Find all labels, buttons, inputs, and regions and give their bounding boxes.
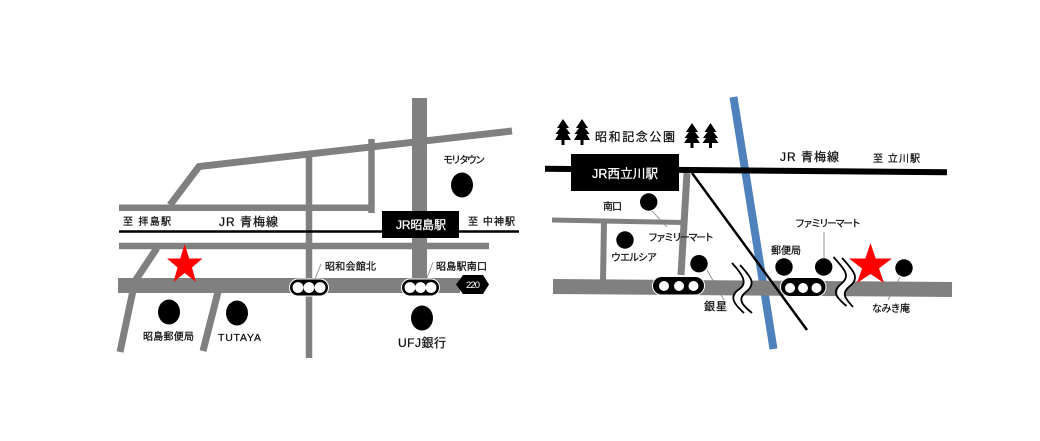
icon: post office marker [775, 258, 793, 276]
traffic signal: west [652, 276, 704, 295]
river [734, 97, 774, 349]
icon: Namikian marker [895, 259, 913, 277]
road break: east [834, 257, 855, 307]
icon: post office marker [158, 300, 180, 324]
leader line: Showa Kaikan north [315, 264, 321, 279]
leader line: Ginsei [707, 270, 724, 300]
station box: JR Nishi-Tachikawa [571, 154, 679, 191]
label: Akishima south exit: 昭島駅南口 [436, 260, 487, 273]
rail line: JR Ome line [545, 169, 947, 172]
label: UFJ bank: UFJ銀行 [398, 336, 446, 350]
leader line: Namikian [888, 277, 900, 300]
label: Moritown: モリタウン [443, 154, 485, 166]
icon: Welcia marker [616, 231, 634, 249]
icon: FamilyMart marker [640, 193, 657, 211]
label: FamilyMart: ファミリーマート [648, 233, 714, 244]
leader line: Akishima south exit [427, 262, 433, 278]
label: to Nakagami station: 至 中神駅 [468, 215, 515, 228]
star: destination [167, 244, 202, 282]
rail line: JR Ome line [119, 230, 519, 233]
icon: UFJ marker [411, 306, 433, 330]
label: south exit: 南口 [603, 200, 622, 213]
trees right [684, 123, 718, 148]
traffic signal: Akishima south exit [402, 279, 440, 296]
label: Showa Kaikan north: 昭和会館北 [325, 260, 376, 273]
panel: Nishi-Tachikawa station map [545, 97, 952, 349]
label: TUTAYA: TUTAYA [218, 332, 261, 344]
label: JR Ome line: JR 青梅線 [780, 149, 839, 164]
label: FamilyMart east: ファミリーマート [795, 219, 861, 230]
label: to Haijima station: 至 拝島駅 [123, 215, 171, 228]
route sign: 220: 220 [466, 280, 480, 291]
road network [552, 173, 952, 290]
label: JR Ome line: JR 青梅線 [219, 214, 278, 229]
label: Akishima post office: 昭島郵便局 [143, 330, 194, 343]
label: to Tachikawa station: 至 立川駅 [873, 152, 920, 165]
icon: Ginsei marker [690, 255, 708, 272]
route sign: 220 [456, 275, 489, 294]
station box: JR Akishima [382, 211, 459, 238]
traffic signal: Showa Kaikan north [290, 279, 328, 296]
trees left [555, 119, 590, 145]
road break: west [732, 263, 752, 313]
rail branch line [692, 173, 807, 330]
label: Showa Kinen Park: 昭和記念公園 [595, 130, 675, 144]
station box: JR Nishi-Tachikawa: JR西立川駅 [592, 167, 658, 181]
road network [118, 98, 512, 358]
station box: JR Akishima: JR昭島駅 [396, 217, 446, 232]
icon: FamilyMart marker east [815, 258, 832, 276]
leader line: FamilyMart east [823, 232, 825, 258]
label: Ginsei: 銀星 [704, 299, 727, 313]
star: destination [849, 243, 892, 283]
label: Welcia: ウエルシア [611, 252, 657, 264]
label: post office: 郵便局 [771, 244, 801, 257]
icon: TUTAYA marker [226, 300, 248, 326]
leader line: FamilyMart [652, 211, 667, 227]
label: Namikian: なみき庵 [872, 302, 910, 315]
panel: Akishima station map [118, 98, 519, 358]
icon: Moritown marker [451, 172, 473, 198]
traffic signal: east [780, 278, 826, 296]
